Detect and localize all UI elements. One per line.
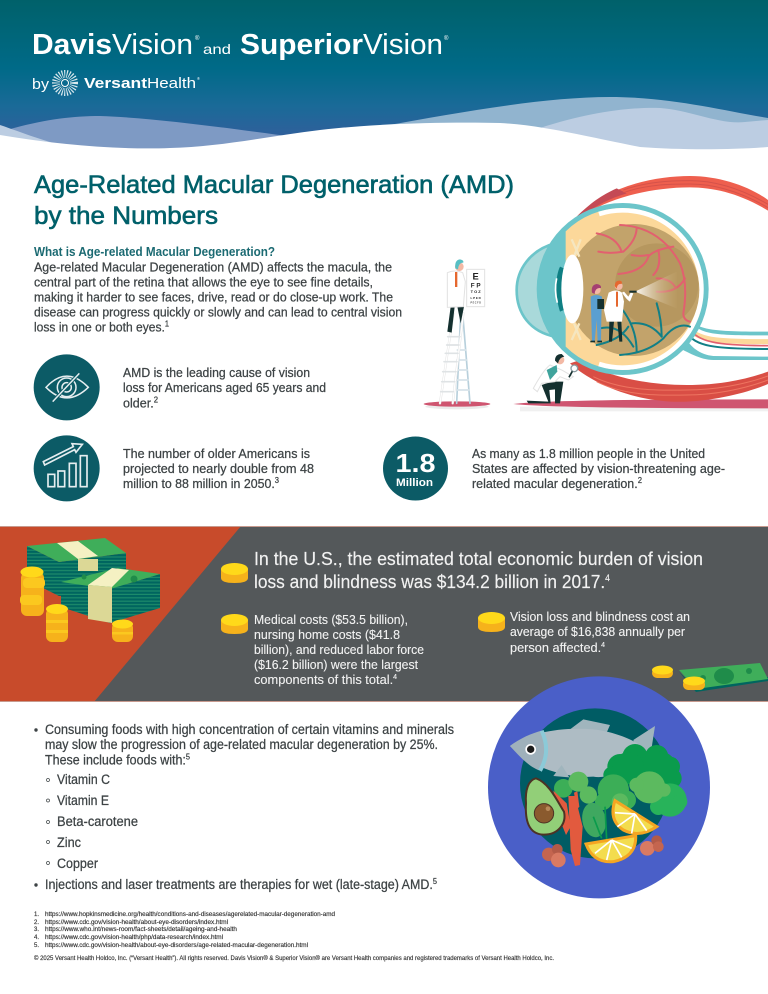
references list: https://www.cdc.gov/vision-health/about-eye-disorders/index.html [45, 920, 228, 926]
references list: 1. [34, 912, 39, 918]
icon: coin [221, 614, 248, 634]
diet and treatment bullet list: Vitamin C [57, 772, 110, 787]
logo: Davis Vision and Superior Vision: Vision [112, 29, 193, 61]
illustration: back money stack [27, 538, 126, 596]
illustration: food plate [488, 676, 710, 898]
AMD leading cause text: 2 [154, 396, 159, 404]
diet and treatment bullet list: may slow the progression of age-related macular degeneration by 25%. [45, 737, 438, 752]
references list: 2. [34, 920, 39, 926]
AMD leading cause text: loss for Americans aged 65 years and [123, 380, 326, 395]
copyright line: © 2025 Versant Health Holdco, Inc. (“Versant Health”). All rights reserved. Davis Vision® & Superior Vision® are Versant Health companies and registered trademarks of Versant Health Holdco, Inc. [34, 955, 554, 962]
logo: Davis Vision and Superior Vision: ® [195, 35, 200, 42]
economic burden headline: loss and blindness was $134.2 billion in 2017. [254, 572, 619, 592]
icon: crossed-out eye [34, 354, 100, 420]
per person cost text: Vision loss and blindness cost an [510, 609, 690, 624]
intro text block [34, 244, 402, 334]
diet and treatment bullet list [34, 722, 454, 892]
diet and treatment bullet list: Copper [57, 856, 98, 871]
illustration: middle coin stack [46, 604, 68, 642]
economic burden headline: 4 [605, 573, 610, 583]
ground shadows and floor [424, 399, 768, 411]
eye chart: P E C F D [470, 303, 481, 305]
economic burden headline [254, 549, 703, 592]
older Americans text: The number of older Americans is [123, 446, 310, 461]
per person cost text: 4 [601, 642, 605, 649]
medical costs text: nursing home costs ($41.8 [254, 627, 400, 642]
references list: https://www.cdc.gov/vision-health/about-eye-disorders/age-related-macular-degeneration.html [45, 943, 308, 949]
icon: growth bar chart [34, 435, 100, 501]
logo: by Versant Health: Health [147, 75, 196, 92]
medical costs text: Medical costs ($53.5 billion), [254, 612, 408, 627]
eye chart: E [473, 271, 479, 281]
spinach [579, 801, 608, 839]
title [34, 171, 514, 230]
eye chart: T O Z [471, 289, 481, 294]
illustration: loose coins [652, 666, 705, 690]
diet and treatment bullet list: Injections and laser treatments are therapies for wet (late-stage) AMD. [45, 877, 464, 892]
1.8 million text: As many as 1.8 million people in the United [472, 446, 705, 461]
diet and treatment bullet list: 5 [433, 877, 438, 886]
logo: by Versant Health: ® [197, 76, 200, 81]
ladder [440, 313, 470, 403]
intro text block: making it harder to see faces, drive, read or do close-up work. The [34, 290, 393, 304]
doctor with flashlight [604, 281, 637, 342]
header banner [0, 0, 768, 165]
diet and treatment bullet list: These include foods with: [45, 752, 197, 768]
AMD leading cause text: older. [123, 396, 155, 410]
retinal blood vessels, teal [597, 303, 690, 355]
avocado [526, 778, 564, 835]
diet and treatment bullet list: Consuming foods with high concentration of certain vitamins and minerals [45, 722, 454, 737]
stat badge: 1.8 million [383, 436, 448, 500]
logo: by Versant Health [32, 74, 200, 93]
logo: Davis Vision and Superior Vision: and [203, 41, 231, 57]
stat badge: 1.8 million: Million [396, 477, 433, 489]
eye chart: L P E D [470, 296, 482, 300]
AMD leading cause text [123, 365, 326, 410]
panel: economic burden band [0, 526, 768, 702]
carrots [553, 791, 583, 866]
medical costs text: billion), and reduced labor force [254, 642, 424, 657]
illustration: right coin stack [112, 620, 133, 642]
diet and treatment bullet list: Beta-carotene [57, 814, 138, 829]
nuts [542, 835, 664, 867]
nurse figure [590, 284, 604, 342]
per person cost text: person affected. [510, 640, 603, 655]
references list: 5. [34, 943, 39, 949]
cornea [517, 243, 563, 337]
optic nerve [677, 318, 768, 360]
logo: Davis Vision and Superior Vision: Vision [363, 29, 443, 61]
1.8 million text: States are affected by vision-threatening age- [472, 461, 725, 476]
stat badge: 1.8 million: 1.8 [396, 448, 436, 478]
intro text block: 1 [165, 320, 170, 328]
1.8 million text: related macular degeneration. [472, 476, 645, 491]
older Americans text [123, 446, 314, 491]
economic burden headline: In the U.S., the estimated total economic burden of vision [254, 549, 703, 569]
1.8 million text [472, 446, 725, 491]
title: Age-Related Macular Degeneration (AMD) [34, 171, 514, 199]
illustration: eye anatomy with doctors [424, 176, 768, 411]
references list: https://www.cdc.gov/vision-health/php/data-research/index.html [45, 935, 223, 941]
logo: by Versant Health: by [32, 76, 50, 93]
references list [34, 912, 335, 949]
intro text block: disease can progress quickly or slowly and can lead to central vision [34, 304, 402, 320]
AMD leading cause text: AMD is the leading cause of vision [123, 365, 310, 380]
medical costs text: 4 [393, 674, 397, 681]
intro text block: What is Age-related Macular Degeneration? [34, 244, 275, 259]
medical costs text: ($16.2 billion) were the largest [254, 657, 418, 672]
medical costs text: components of this total. [254, 672, 395, 687]
logo: Davis Vision and Superior Vision: Davis [32, 29, 112, 61]
logo: by Versant Health: Versant [84, 75, 147, 92]
retinal blood vessels, red [597, 225, 690, 322]
eyeball [537, 203, 709, 375]
medical costs text [254, 612, 424, 687]
eye chart: F P [471, 283, 481, 290]
per person cost text [510, 609, 690, 655]
references list: 3. [34, 927, 39, 933]
older Americans text: million to 88 million in 2050. [123, 476, 283, 491]
older Americans text: 3 [275, 476, 280, 485]
orange slices [586, 801, 657, 862]
illustration: dollar bill [679, 663, 768, 692]
illustration: front money stack [61, 568, 160, 623]
references list: 4. [34, 935, 39, 941]
references list: https://www.who.int/news-room/fact-sheets/detail/ageing-and-health [45, 927, 237, 933]
intro text block: loss in one or both eyes. [34, 320, 175, 334]
diet and treatment bullet list: Zinc [57, 835, 81, 850]
flashlight beam [635, 272, 677, 308]
kneeling doctor with magnifier [527, 354, 578, 403]
eye chart [467, 269, 485, 307]
diet and treatment bullet list: Vitamin E [57, 793, 109, 808]
title: by the Numbers [34, 202, 218, 230]
fish [510, 719, 655, 777]
doctor on ladder [447, 259, 465, 333]
1.8 million text: 2 [638, 476, 643, 485]
icon: coin [478, 612, 505, 632]
logo: Davis Vision and Superior Vision: Superior [240, 29, 363, 61]
eye muscles [570, 176, 768, 402]
references list: https://www.hopkinsmedicine.org/health/conditions-and-diseases/agerelated-macular-degeneration-amd [45, 912, 335, 918]
icon: coin [221, 563, 248, 583]
intro text block: Age-related Macular Degeneration (AMD) affects the macula, the [34, 260, 392, 274]
illustration: left coin stack [20, 566, 45, 616]
intro text block: central part of the retina that allows the eye to see fine details, [34, 274, 373, 290]
logo: Davis Vision and Superior Vision: ® [444, 35, 449, 42]
diet and treatment bullet list: 5 [186, 752, 191, 762]
logo: Davis Vision and Superior Vision [32, 29, 449, 61]
per person cost text: average of $16,838 annually per [510, 624, 686, 639]
broccoli [554, 744, 687, 817]
older Americans text: projected to nearly double from 48 [123, 461, 314, 476]
